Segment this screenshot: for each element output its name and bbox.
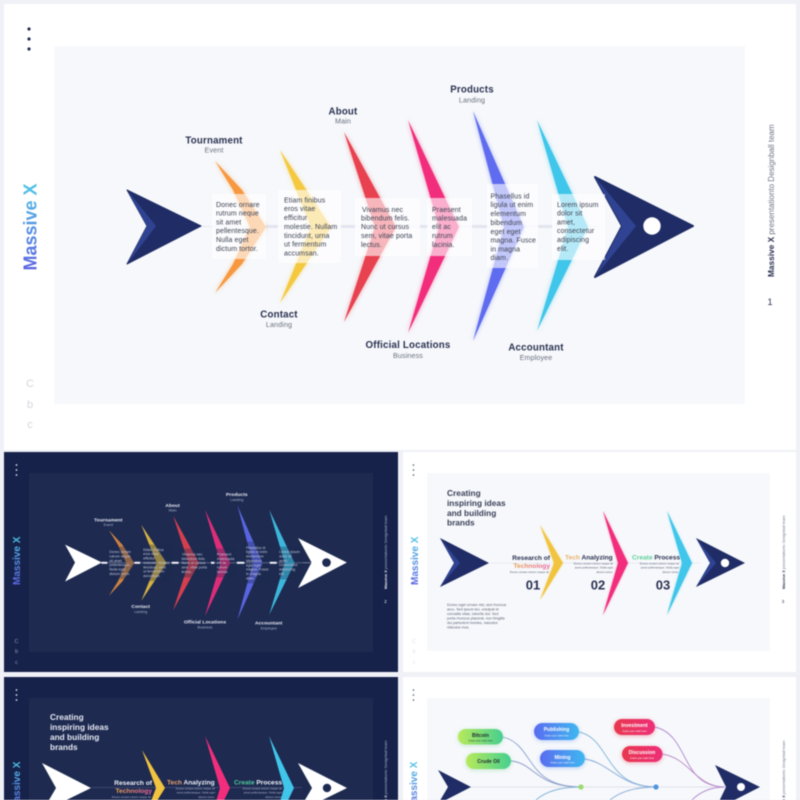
step 3: Create Process (632, 554, 680, 562)
text block 4: elit ac (432, 224, 451, 231)
fish diagram: Products (226, 492, 248, 498)
fish diagram: sit amet (109, 559, 122, 563)
paragraph: Donec eget ornare nisi, sed rhoncus (447, 603, 506, 607)
fish diagram: in magna (246, 572, 261, 576)
fish diagram: malesuada (217, 557, 234, 561)
text block 6: adipiscing (557, 237, 589, 244)
step 1: Donec ornare rutrum neque sit (510, 570, 549, 574)
heading: and building (50, 732, 99, 742)
section letters: c (15, 660, 18, 666)
pill: Mining (540, 750, 585, 767)
step 3: Create Process (234, 780, 282, 786)
section letters: b (413, 649, 416, 655)
text block 6: elit. (557, 246, 568, 253)
section letters: b (27, 399, 33, 411)
step 3: amet pellentesque. Nulla eget (244, 790, 282, 794)
step 2: dictum tortor. (198, 795, 215, 799)
spine (200, 226, 600, 228)
text block 2: molestie. Nullam (284, 224, 337, 231)
slide: dark three-step process (4, 677, 398, 800)
menu dots (27, 27, 31, 51)
fish diagram: Landing (134, 610, 147, 614)
heading: inspiring ideas (447, 498, 506, 508)
step 1: Donec ornare rutrum neque sit (112, 795, 151, 799)
text block 4: rutrum (432, 233, 453, 240)
step 1: 01 (526, 578, 540, 592)
fish diagram: dictum tortor. (109, 572, 130, 576)
fish diagram: accumsan. (143, 574, 160, 578)
fish diagram: pellentesque. (109, 563, 131, 567)
fish diagram: efficitur (143, 557, 156, 561)
pill: Mining: Mining (554, 755, 571, 761)
vertical caption: Massive X presentationto Designball team (781, 515, 786, 589)
text block 5: Phasellus id (490, 194, 529, 200)
step 2: dictum tortor. (596, 570, 613, 574)
slide: light three-step process (403, 452, 796, 672)
content panel (54, 46, 745, 404)
icon: fish tail (42, 763, 91, 800)
label: Products (450, 84, 494, 104)
fish diagram: Nunc ut cursus (182, 561, 206, 565)
page number: 3 (782, 599, 785, 604)
paragraph: arcu. Sed ipsum leo, volutpat et (447, 608, 499, 612)
fish diagram: Main (169, 509, 177, 513)
dark panel (29, 473, 373, 652)
label: Contact (260, 310, 298, 329)
fish diagram: eget eget (246, 564, 261, 568)
step 2 (565, 554, 613, 592)
spine (490, 562, 700, 564)
menu dots (413, 464, 414, 476)
text block 5: ligula ut enim (490, 202, 533, 209)
heading: brands (50, 742, 78, 752)
menu dots (16, 464, 17, 476)
menu dots (16, 689, 17, 701)
step 3: Donec ornare rutrum neque sit (640, 562, 679, 566)
text block 6: amet, (557, 220, 575, 226)
text block 4: Praesent (432, 207, 461, 214)
step 2: 02 (591, 578, 605, 592)
fish diagram: Nulla eget (109, 568, 125, 572)
step 3: Donec ornare rutrum neque sit (243, 786, 282, 790)
pill: Publishing: Crave your mark here (544, 734, 569, 738)
label: Products: Products (450, 84, 494, 96)
fish diagram: eros vitae (143, 552, 159, 556)
step 1: Technology (513, 563, 550, 570)
step 2: Tech Analyzing (167, 780, 215, 786)
fish diagram: dolor sit (279, 554, 292, 558)
label: About: Main (335, 116, 351, 126)
fish diagram: Tournament (94, 517, 123, 523)
pill: Investment: Investment (621, 723, 648, 729)
label: About: About (329, 106, 358, 118)
pill: Bitcoin: Bitcoin (472, 733, 489, 739)
icon: fish head (715, 765, 760, 800)
section letters: c (413, 660, 416, 666)
fish diagram: molestie. Nullam (143, 561, 170, 565)
menu dots (413, 689, 414, 701)
fish diagram: lacinia. (217, 570, 228, 574)
heading: inspiring ideas (50, 722, 109, 732)
paragraph: porta rhoncus placerat, non fringilla (447, 616, 506, 620)
section letters (15, 639, 19, 666)
paragraph: ridiculus mus. (447, 626, 470, 630)
text block 6: consectetur (557, 228, 595, 235)
pill: Investment (614, 719, 655, 735)
text panels over ribs (212, 184, 605, 268)
step 1 (112, 780, 153, 799)
heading: and building (447, 508, 496, 518)
fish diagram: Etiam finibus (143, 548, 164, 552)
pill: Investment: Crave your mark here (622, 730, 647, 733)
label: Tournament: Tournament (185, 136, 243, 146)
text block 1: dictum tortor. (216, 246, 258, 253)
label: Tournament: Event (205, 146, 223, 154)
text block 3: Vivamus nec (362, 207, 403, 214)
page number: 2 (384, 599, 387, 604)
fish diagram: Business (198, 625, 213, 629)
chevrons (540, 511, 692, 615)
text block 2: ut fermentum (284, 242, 327, 248)
node: blue dot (653, 784, 659, 790)
vertical brand title: Massive X (410, 536, 421, 585)
fish diagram: ut fermentum (143, 570, 164, 574)
step 2: amet pellentesque. Nulla eget (177, 790, 215, 794)
pill: Crude Oil (466, 753, 511, 769)
pill: Crude Oil: Crude Oil (477, 759, 500, 765)
step 2: Donec ornare rutrum neque sit (574, 562, 613, 566)
pill: Publishing: Publishing (544, 727, 569, 733)
text block 5: magna. Fusce (490, 238, 536, 244)
label: Accountant (508, 342, 564, 362)
pill: Publishing (534, 723, 579, 740)
fish ribs (215, 111, 588, 341)
fish diagram: diam. (246, 576, 255, 580)
text block 5: in magna (490, 246, 520, 254)
text block 3: sem, vitae porta (361, 233, 412, 240)
section letters: C (412, 639, 416, 645)
fish diagram: Employee (261, 626, 277, 630)
section letters: C (26, 378, 34, 390)
step 3 (234, 780, 282, 799)
vertical presentation caption: Massive X presentationto Designball team (766, 124, 776, 277)
label: Tournament (185, 136, 243, 154)
text block 5: elementum (490, 211, 526, 218)
fish diagram: Event (104, 523, 113, 527)
fish diagram: ligula ut enim (246, 550, 267, 554)
step 3: amet pellentesque. Nulla eget (641, 566, 679, 570)
fish diagram: elit. (279, 572, 285, 576)
label: About (329, 106, 358, 126)
text block 2: accumsan. (284, 250, 319, 258)
text block 3: lectus. (361, 242, 382, 249)
icon: fish tail (127, 190, 201, 264)
paragraph: convallis vitae, lobortis dui. Sed (447, 612, 498, 616)
heading: Creating (50, 712, 84, 722)
pill: Discussion: Discussion (629, 750, 655, 756)
step 3: dictum tortor. (265, 795, 282, 799)
section letters: c (27, 419, 33, 431)
pill: Discussion (622, 746, 662, 762)
step 3: 03 (656, 578, 670, 592)
fish diagram: Lorem ipsum (279, 550, 300, 554)
section letters: C (15, 639, 19, 645)
fish diagram: tincidunt, urna (143, 566, 166, 570)
icon: fish head (595, 177, 693, 277)
connector curves (503, 727, 725, 800)
pill: Mining: Crave your mark here (550, 762, 575, 764)
fish diagram: Phasellus id (246, 546, 265, 550)
icon: fish tail (438, 770, 471, 800)
label: Official Locations (366, 340, 450, 360)
fish diagram: bibendum felis. (182, 557, 206, 561)
step 1 (510, 555, 551, 592)
step 2: amet pellentesque. Nulla eget (575, 566, 613, 570)
vertical caption: Massive X presentationto Designball team (383, 515, 388, 589)
fish diagram: About (165, 503, 180, 509)
fish diagram: lectus. (182, 570, 192, 574)
panel (29, 698, 373, 800)
step 2: Donec ornare rutrum neque sit (176, 786, 215, 790)
fish diagram: Landing (230, 498, 243, 502)
fish diagram: Official Locations (184, 619, 226, 625)
text block 1: pellentesque. (216, 228, 259, 235)
heading: brands (447, 518, 475, 528)
fish diagram: bibendum (246, 559, 262, 563)
heading: Creating (447, 488, 481, 498)
label: Accountant: Accountant (508, 342, 564, 354)
text block 1: rutrum neque (216, 210, 259, 218)
step 1: Research of (114, 780, 153, 787)
fish diagram: Contact (131, 604, 150, 610)
text block 2: tincidunt, urna (284, 233, 329, 240)
fish diagram: Accountant (255, 621, 283, 627)
label: Products: Landing (459, 96, 485, 104)
label: Accountant: Employee (520, 353, 552, 362)
text block 5: bibendum (490, 220, 522, 227)
text block 3: Nunc ut cursus (361, 224, 409, 231)
spine (92, 786, 302, 788)
label: Contact: Contact (260, 310, 298, 320)
icon: fish tail (440, 538, 489, 587)
icon: fish head (696, 538, 745, 587)
label: Official Locations: Business (393, 351, 423, 360)
slide: light branching tree (403, 677, 796, 800)
fish diagram: Donec ornare (109, 550, 131, 554)
text block 1: sit amet (216, 220, 241, 226)
fish diagram: rutrum (217, 566, 227, 570)
fish diagram: elementum (246, 555, 264, 559)
spine (471, 786, 725, 788)
text block 2: efficitur (284, 215, 308, 222)
fish diagram: magna. Fusce (246, 568, 269, 572)
section letters (412, 639, 416, 666)
text block 1: Nulla eget (216, 237, 249, 244)
text block 3: bibendum felis. (361, 216, 410, 222)
text block 2: eros vitae (284, 206, 315, 213)
fish diagram: Vivamus nec (182, 553, 203, 557)
fish diagram: Praesent (217, 553, 231, 557)
fish diagram: elit ac (217, 561, 227, 565)
step 3 (632, 554, 680, 592)
panel (427, 698, 770, 800)
label: Official Locations: Official Locations (366, 340, 450, 351)
vertical brand title: Massive X (20, 183, 40, 270)
page number: 1 (767, 297, 773, 307)
text block 5: diam. (490, 255, 508, 262)
text block 5: eget eget (490, 229, 521, 236)
fish diagram: adipiscing (279, 568, 295, 572)
text block 6: dolor sit (557, 210, 582, 218)
pill: Bitcoin: Crave your mark here (468, 740, 493, 742)
section letters: b (15, 649, 18, 655)
fish diagram: sem, vitae porta (182, 566, 207, 570)
step 2 (167, 780, 215, 799)
fish diagram (65, 492, 347, 630)
vertical brand title: Massive X (12, 536, 23, 585)
panel (427, 473, 770, 651)
icon: fish head (298, 763, 347, 800)
fish diagram: amet, (279, 559, 288, 563)
pill: Discussion: Crave your mark here (630, 757, 655, 760)
text block 4: malesuada (432, 216, 467, 222)
node: green dot (578, 784, 584, 790)
fish diagram: consectetur (279, 563, 298, 567)
fish diagram: rutrum neque (109, 554, 131, 558)
pill: Bitcoin (458, 729, 503, 744)
step 1: Technology (115, 788, 152, 795)
chevrons (142, 736, 294, 800)
text block 2: Etiam finibus (284, 198, 326, 204)
slide: main light fishbone (4, 4, 796, 450)
text block 4: lacinia. (432, 242, 455, 249)
paragraph: dui parturient montes, nascetur (447, 621, 499, 625)
text block 6: Lorem ipsum (557, 202, 599, 209)
text block 1: Donec ornare (216, 202, 260, 209)
step 2: Tech Analyzing (565, 554, 613, 562)
slide: dark fishbone thumbnail (4, 452, 398, 672)
label: Contact: Landing (266, 320, 292, 329)
section letters (26, 378, 34, 431)
step 1: Research of (512, 555, 551, 562)
step 3: dictum tortor. (662, 570, 679, 574)
